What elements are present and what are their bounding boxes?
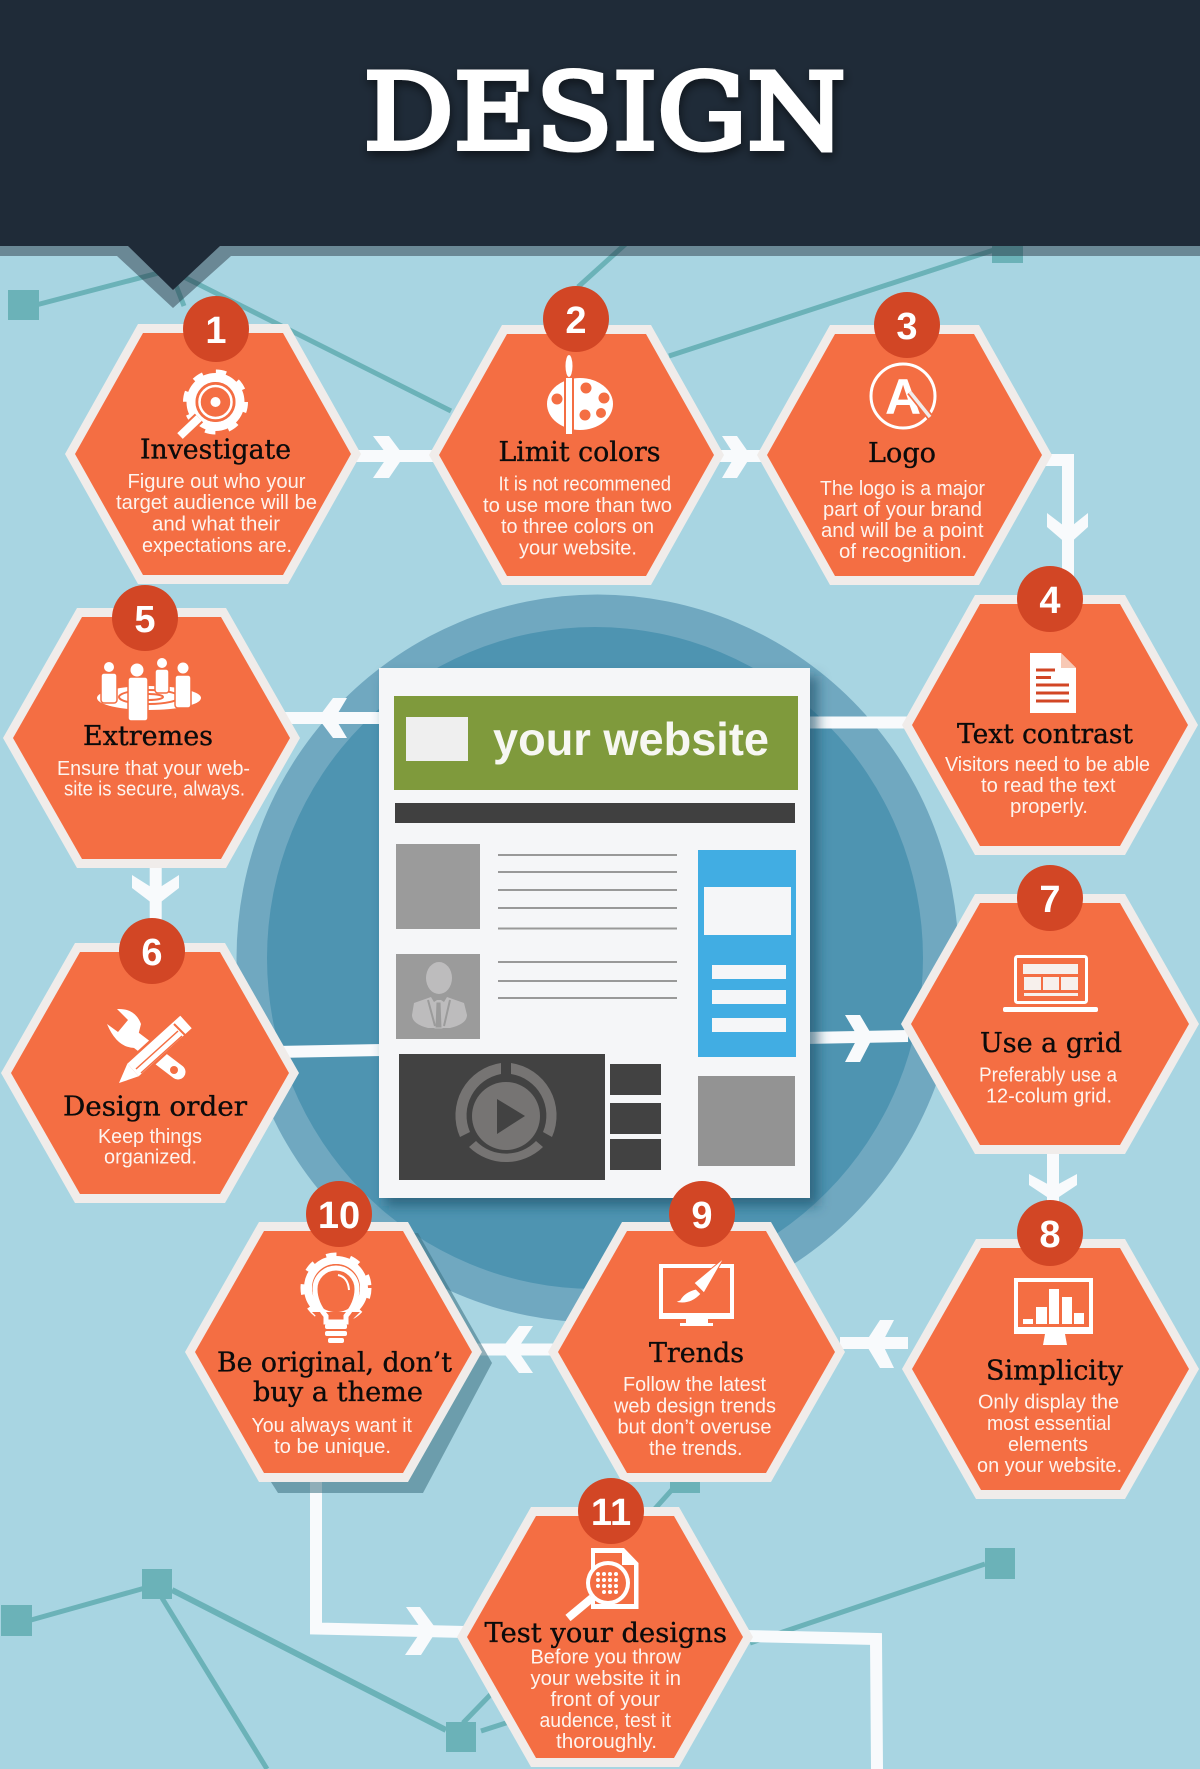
step 8: simplicity: Only display the [978, 1390, 1119, 1414]
step 3: logo: Logo [868, 438, 936, 469]
step 7: use a grid [901, 865, 1199, 1154]
step 11: test your designs: 11 [591, 1492, 631, 1534]
icon: monitor with brush [659, 1258, 734, 1326]
step 6: design order: 6 [141, 932, 163, 974]
step 1: investigate: target audience will be [116, 491, 317, 514]
step 3: logo: of recognition. [839, 540, 967, 563]
step 6: design order: organized. [104, 1146, 197, 1168]
step 2: limit colors [429, 286, 724, 585]
step 11: test your designs: Test your designs [484, 1618, 727, 1649]
step 5: extremes: 5 [134, 599, 156, 641]
icon: laptop grid [1003, 956, 1098, 1012]
video player [399, 1054, 605, 1180]
step 7: use a grid: 7 [1039, 879, 1061, 921]
step 5: extremes: Extremes [83, 721, 213, 752]
sidebar [698, 850, 796, 1057]
step 7: use a grid: Use a grid [980, 1028, 1122, 1059]
icon: light bulb gear [304, 1256, 368, 1343]
step 3: logo [757, 292, 1052, 585]
step 2: limit colors: Limit colors [498, 437, 660, 468]
step 1: investigate: expectations are. [142, 534, 292, 557]
step 8: simplicity [902, 1200, 1199, 1499]
step 11: test your designs: audence, test it [540, 1709, 671, 1732]
step 9: trends: the trends. [649, 1437, 742, 1460]
title: DESIGN [364, 52, 846, 174]
icon: monitor with bar chart [1016, 1280, 1091, 1345]
icon: logo badge: A [885, 369, 921, 425]
step 7: use a grid: Preferably use a [979, 1064, 1118, 1086]
step 4: text contrast [902, 566, 1198, 855]
step 2: limit colors: your website. [519, 536, 637, 560]
icon: people on target [97, 658, 201, 721]
text lines [498, 855, 677, 998]
step 11: test your designs: Before you throw [530, 1646, 681, 1668]
step 9: trends: but don’t overuse [618, 1416, 772, 1438]
step 10: be original: Be original, don’t [217, 1348, 452, 1378]
step 4: text contrast: properly. [1010, 795, 1088, 818]
step 11: test your designs: front of your [550, 1688, 660, 1711]
header banner [0, 0, 1200, 290]
step 9: trends: Follow the latest [623, 1373, 766, 1396]
video thumbnails [610, 1064, 661, 1170]
icon: logo badge [871, 364, 935, 428]
step 9: trends [548, 1181, 845, 1482]
step 5: extremes: Ensure that your web- [57, 757, 250, 780]
step 4: text contrast: Text contrast [957, 719, 1133, 750]
step 9: trends: web design trends [613, 1394, 776, 1418]
step 3: logo: The logo is a major [820, 477, 985, 500]
step 2: limit colors: 2 [565, 300, 587, 342]
profile image [396, 954, 480, 1039]
connector arrows [132, 436, 1088, 1769]
step 6: design order: Keep things [98, 1125, 202, 1148]
nav bar [395, 803, 795, 823]
step 10: be original [185, 1181, 492, 1493]
step 5: extremes: site is secure, always. [64, 778, 245, 800]
header shadow band [0, 246, 1200, 308]
step 5: extremes [3, 585, 300, 868]
step 3: logo: part of your brand [823, 498, 982, 521]
step 2: limit colors: to use more than two [483, 494, 672, 517]
icon: palette and brush [547, 355, 613, 434]
icon: gear with magnifier [180, 373, 244, 436]
site header [394, 696, 798, 790]
step 1: investigate: Figure out who your [128, 470, 306, 493]
step 9: trends: 9 [691, 1195, 713, 1237]
step 3: logo: 3 [896, 306, 918, 348]
step 10: be original: 10 [318, 1195, 360, 1237]
step 10: be original: buy a theme [253, 1377, 423, 1408]
site header: your website [493, 713, 769, 765]
step 10: be original: to be unique. [274, 1435, 391, 1458]
step 8: simplicity: elements [1008, 1433, 1088, 1456]
step 8: simplicity: 8 [1039, 1214, 1061, 1256]
step 8: simplicity: Simplicity [986, 1356, 1124, 1386]
step 3: logo: and will be a point [821, 519, 984, 542]
step 4: text contrast: Visitors need to be able [945, 753, 1150, 776]
icon: document [1030, 653, 1076, 713]
icon: document with magnifier [568, 1548, 638, 1618]
step 8: simplicity: most essential [987, 1412, 1111, 1435]
step 1: investigate [65, 296, 361, 584]
step 10: be original: You always want it [252, 1414, 412, 1437]
step 4: text contrast: to read the text [981, 774, 1116, 797]
central circles [236, 594, 958, 1322]
step 2: limit colors: to three colors on [501, 515, 654, 538]
step 11: test your designs [457, 1478, 753, 1767]
step 6: design order: Design order [63, 1092, 247, 1122]
image placeholder [396, 844, 480, 929]
step 11: test your designs: thoroughly. [556, 1730, 657, 1753]
step 1: investigate: 1 [205, 310, 227, 352]
icon: wrench and pencil [107, 1009, 188, 1083]
step 4: text contrast: 4 [1039, 580, 1061, 622]
step 9: trends: Trends [649, 1338, 744, 1369]
background network lines [1, 240, 1023, 1769]
step 8: simplicity: on your website. [977, 1454, 1122, 1477]
step 11: test your designs: your website it in [530, 1667, 681, 1690]
ad placeholder [698, 1076, 795, 1166]
step 2: limit colors: It is not recommened [498, 472, 671, 496]
step 6: design order [1, 918, 299, 1203]
website mockup [379, 668, 818, 1206]
step 7: use a grid: 12-colum grid. [986, 1084, 1112, 1108]
step 1: investigate: and what their [152, 512, 280, 536]
step 1: investigate: Investigate [140, 434, 291, 466]
